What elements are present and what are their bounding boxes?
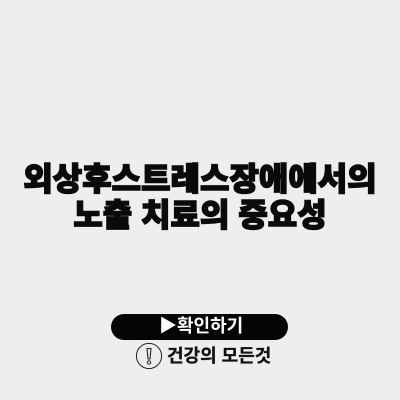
button: confirm [111, 314, 288, 340]
subtitle: brand name: 건강의 모든것 [167, 346, 271, 366]
title [23, 161, 377, 232]
button label: ▶확인하기 [159, 316, 243, 336]
icon: exclamation in circle [136, 342, 162, 370]
title: 노출 치료의 중요성 [73, 196, 327, 232]
title: 외상후스트레스장애에서의 [23, 161, 377, 197]
